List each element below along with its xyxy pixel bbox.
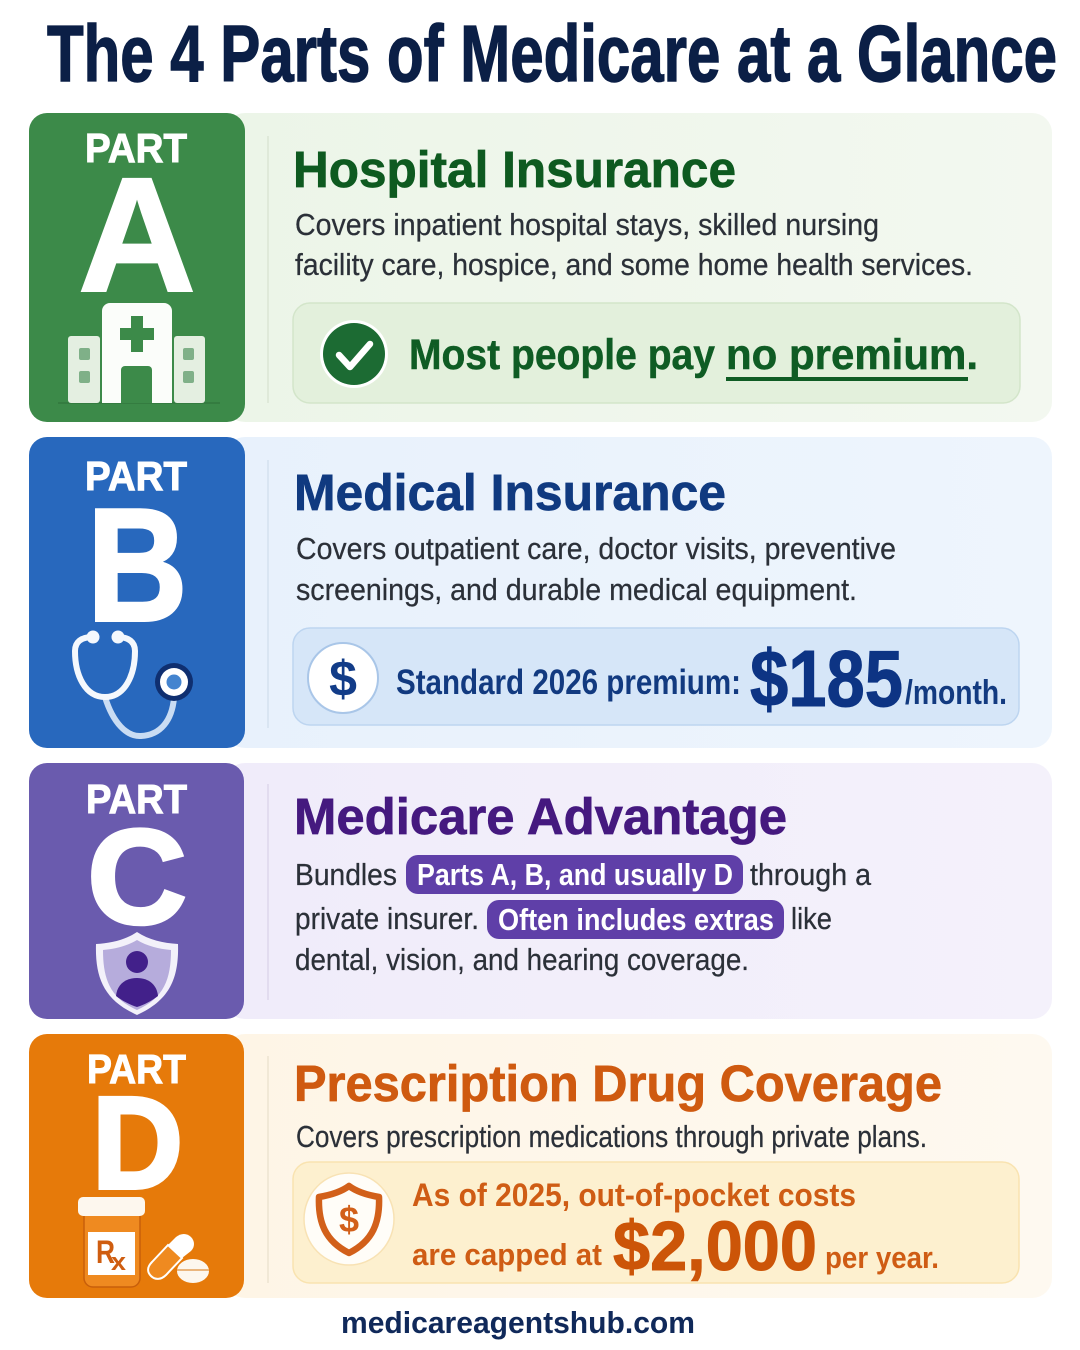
cap amount: $2,000 <box>613 1207 817 1285</box>
Part D description: Covers prescription medications through private plans. <box>296 1119 927 1154</box>
callout text: no premium. <box>726 331 978 379</box>
premium amount: $185 <box>750 634 903 723</box>
Part C description: dental, vision, and hearing coverage. <box>295 942 749 977</box>
Part D label: PART <box>87 1046 186 1092</box>
Part B heading: Medical Insurance <box>294 464 726 521</box>
Part B letter: B <box>87 476 188 656</box>
Part C label: PART <box>86 776 187 822</box>
Part B description: Covers outpatient care, doctor visits, preventive <box>296 531 896 566</box>
tablet <box>177 1259 209 1283</box>
icon: pill bottle and pills <box>78 1197 209 1287</box>
Part C description: like <box>791 901 832 936</box>
panel: Part B <box>29 437 1052 748</box>
Part B tile <box>29 437 245 748</box>
highlight: extras: Often includes extras <box>498 902 774 937</box>
icon: pill bottle and pills: R <box>96 1234 115 1270</box>
callout text: Most people pay <box>409 331 715 379</box>
icon: stethoscope <box>75 630 193 736</box>
footer website: medicareagentshub.com <box>341 1305 695 1340</box>
icon: dollar coin: $ <box>329 651 357 707</box>
Part B label: PART <box>85 453 187 499</box>
Part A description: facility care, hospice, and some home health services. <box>295 247 973 282</box>
panel: Part C <box>29 763 1052 1019</box>
Part B description <box>296 531 896 607</box>
panel: Part A <box>29 113 1052 422</box>
Part D tile <box>29 1034 244 1298</box>
highlight: parts bundled: Parts A, B, and usually D <box>417 857 733 892</box>
Part C description: private insurer. <box>295 901 479 936</box>
Part B description: screenings, and durable medical equipment. <box>296 572 857 607</box>
icon: shield with dollar <box>304 1173 394 1265</box>
cap period: per year. <box>825 1240 939 1275</box>
icon: hospital <box>58 303 220 403</box>
icon: shield with person <box>96 932 178 1015</box>
Part C tile <box>29 763 244 1019</box>
callout: no premium <box>293 303 1020 403</box>
Part C heading: Medicare Advantage <box>294 788 787 845</box>
cap text line 1: As of 2025, out-of-pocket costs <box>412 1177 856 1213</box>
icon: shield with dollar: $ <box>339 1199 359 1240</box>
premium period: /month. <box>905 674 1007 712</box>
callout: out-of-pocket cap <box>293 1162 1019 1285</box>
icon: dollar coin <box>308 643 378 713</box>
callout: premium <box>293 628 1019 725</box>
capsule <box>148 1234 194 1279</box>
Part C description <box>295 855 872 977</box>
callout text <box>409 331 978 381</box>
Part A label: PART <box>85 125 187 171</box>
Part D letter: D <box>92 1069 183 1216</box>
Part C description: Bundles <box>295 857 397 892</box>
Part A letter: A <box>78 143 196 326</box>
Part A heading: Hospital Insurance <box>293 141 736 198</box>
Part A tile <box>29 113 245 422</box>
Part A description <box>295 207 973 282</box>
panel: Part D <box>29 1034 1052 1298</box>
cap text line 2: are capped at <box>412 1237 602 1272</box>
icon: check mark <box>320 320 388 388</box>
Part C description: through a <box>750 857 872 892</box>
Part D heading: Prescription Drug Coverage <box>294 1055 942 1112</box>
icon: pill bottle and pills: x <box>111 1249 127 1276</box>
Part A description: Covers inpatient hospital stays, skilled nursing <box>295 207 879 242</box>
premium text: Standard 2026 premium: <box>396 663 741 702</box>
Part C letter: C <box>88 803 186 952</box>
